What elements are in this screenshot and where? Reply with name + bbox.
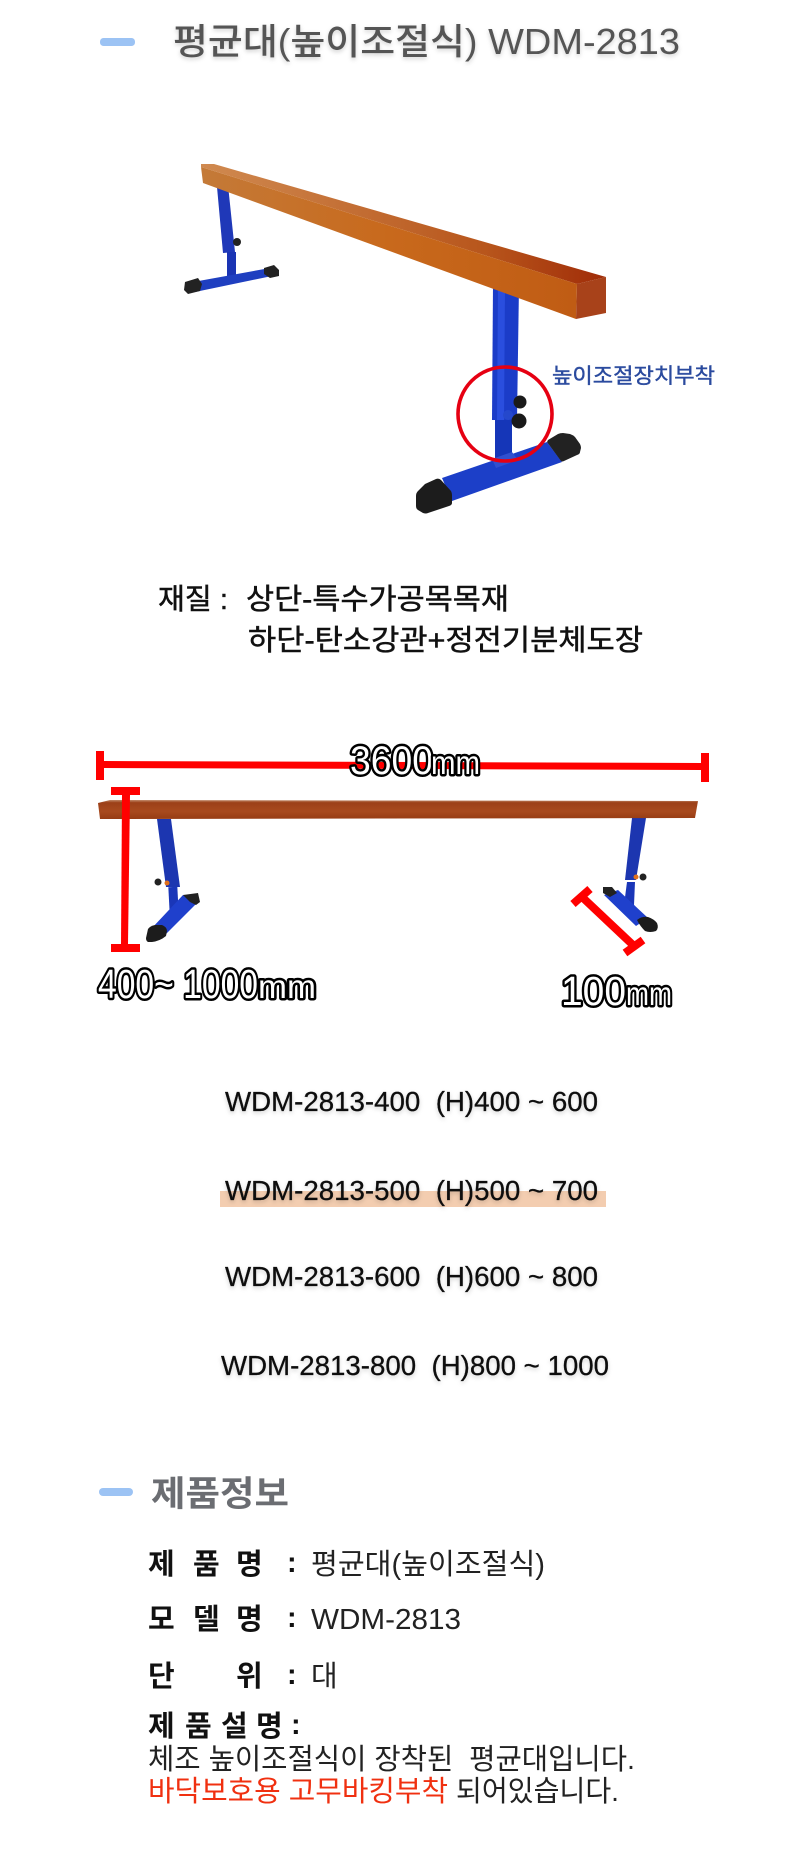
model row 400: WDM-2813-400 (H)400 ~ 600 — [225, 1086, 598, 1117]
dimension: width 100mm: 100 — [561, 968, 626, 1014]
row: description heading: : — [291, 1709, 301, 1741]
row: unit: 단 — [148, 1660, 175, 1693]
row: unit: : — [287, 1659, 297, 1691]
row: description heading: 제 — [148, 1710, 175, 1743]
row: model name: 모 — [148, 1604, 175, 1636]
callout: height adjuster circle — [458, 367, 552, 461]
row: unit — [148, 1659, 338, 1693]
near leg — [416, 285, 581, 514]
foot pad near — [416, 479, 452, 514]
model row 500: WDM-2813-500 (H)500 ~ 700 — [225, 1175, 598, 1206]
dimension: width 100mm: mm — [626, 975, 672, 1012]
material text — [158, 583, 643, 657]
section heading: 제품정보 — [151, 1475, 289, 1514]
left leg — [146, 819, 200, 942]
row: model name: WDM-2813 — [311, 1604, 461, 1636]
row: product name: 품 — [193, 1549, 220, 1581]
row: description heading — [148, 1709, 301, 1743]
description text: 체조 높이조절식이 장착된 평균대입니다. — [148, 1743, 635, 1776]
callout label: 높이조절장치부착 — [552, 365, 715, 388]
foot pad far — [547, 433, 581, 462]
dimension: length 3600mm: 3600 — [350, 739, 433, 783]
beam — [201, 164, 606, 319]
row: description heading: 품 — [185, 1711, 212, 1743]
dimension: height 400~1000mm — [98, 787, 316, 1007]
dimension: length 3600mm — [96, 739, 709, 783]
model row 600: WDM-2813-600 (H)600 ~ 800 — [225, 1261, 598, 1292]
model list — [220, 1086, 609, 1381]
knobs — [503, 396, 526, 428]
row: unit: 대 — [311, 1660, 338, 1693]
dimension: width 100mm — [561, 889, 672, 1014]
row: product name: : — [287, 1547, 297, 1579]
dimension: length 3600mm: mm — [431, 744, 480, 781]
material text: 재질 : — [158, 584, 228, 616]
row: unit: 위 — [236, 1660, 263, 1693]
section marker — [99, 1488, 133, 1496]
material text: 하단-탄소강관+정전기분체도장 — [248, 624, 643, 657]
row: model name — [148, 1602, 461, 1636]
dimension: height 400~1000mm: 400~ 1000 — [98, 961, 258, 1007]
model row 800: WDM-2813-800 (H)800 ~ 1000 — [221, 1350, 609, 1381]
beam front — [98, 800, 698, 819]
row: description heading: 설 — [221, 1710, 248, 1743]
row: product name: 제 — [148, 1548, 175, 1581]
right leg — [603, 818, 658, 932]
row: product name: 평균대(높이조절식) — [311, 1548, 545, 1581]
row: model name: 델 — [193, 1603, 220, 1636]
row: description heading: 명 — [256, 1710, 283, 1743]
photo: balance beam perspective view — [184, 164, 606, 514]
title bar marker — [100, 38, 135, 46]
dimension: height 400~1000mm: mm — [258, 968, 316, 1005]
row: model name: 명 — [236, 1603, 263, 1636]
photo: balance beam front view — [98, 800, 698, 942]
material text: 상단-특수가공목목재 — [246, 583, 509, 616]
description text end: 되어있습니다. — [456, 1776, 619, 1808]
product info table — [148, 1547, 635, 1808]
title: 평균대(높이조절식) WDM-2813 — [173, 21, 680, 62]
row: product name — [148, 1547, 545, 1581]
far leg — [184, 185, 279, 294]
red description text: 바닥보호용 고무바킹부착 — [148, 1775, 448, 1808]
row: product name: 명 — [236, 1548, 263, 1581]
row: model name: : — [287, 1602, 297, 1634]
highlight band — [220, 1191, 606, 1207]
